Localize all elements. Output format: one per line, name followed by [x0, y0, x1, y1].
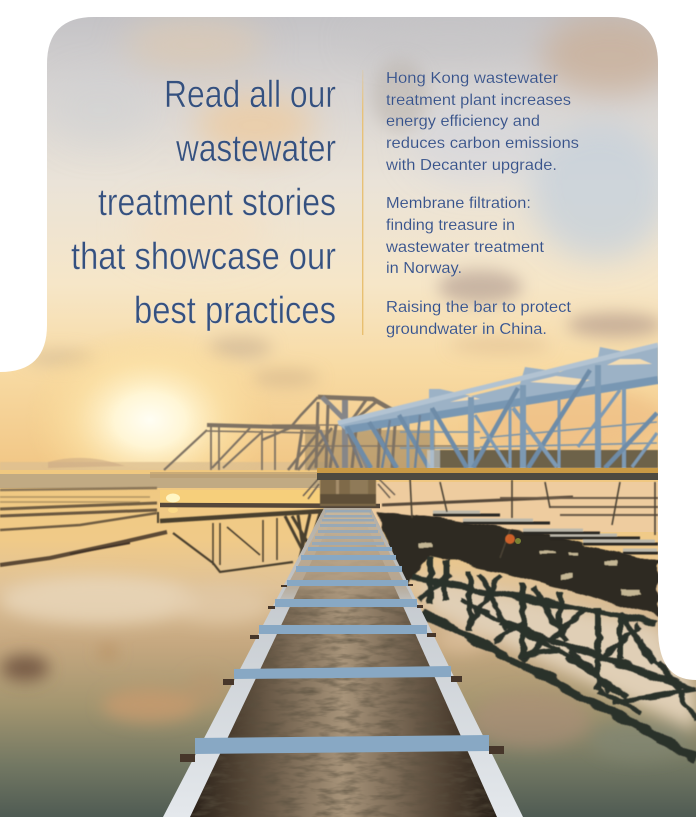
- right tank floats: [382, 478, 658, 558]
- story: Hong Kong: reduces carbon emissions: [386, 135, 579, 152]
- left tank floats: [0, 488, 167, 565]
- text block: heading: wastewater: [175, 128, 336, 170]
- story: Norway: finding treasure in: [386, 217, 515, 234]
- story: Norway: Membrane filtration:: [386, 195, 531, 212]
- distant skyline: [0, 458, 324, 470]
- story: Norway: in Norway.: [386, 260, 462, 277]
- sun glow: [62, 368, 240, 470]
- text block: heading: best practices: [134, 290, 336, 332]
- truss diagonals and posts: [471, 365, 598, 468]
- water: [0, 470, 696, 817]
- text block: stories: [385, 70, 579, 338]
- left truss reflection: [158, 511, 325, 572]
- truss rails: [400, 422, 657, 448]
- story: Hong Kong: [385, 70, 579, 174]
- truss top deck: [338, 345, 658, 430]
- central pillar: [302, 478, 396, 506]
- water channel: [190, 551, 497, 817]
- story: Norway: wastewater treatment: [385, 239, 545, 256]
- rim of circular tank: [160, 505, 380, 506]
- divider: [362, 70, 363, 335]
- lighter water near bridge: [280, 512, 412, 599]
- small beams near bridge: [312, 510, 384, 545]
- hedge behind truss: [430, 450, 658, 468]
- sun reflection: [166, 494, 180, 513]
- sky: [0, 15, 696, 477]
- right shadow and reflection of truss: [376, 512, 696, 757]
- far truss: [164, 397, 470, 470]
- lens flare: [505, 534, 521, 544]
- story: Hong Kong: energy efficiency and: [386, 113, 540, 130]
- text block: heading: Read all our: [164, 74, 336, 116]
- story: Hong Kong: with Decanter upgrade.: [385, 157, 557, 174]
- bridge deck: [150, 468, 658, 480]
- story: China: [386, 299, 572, 338]
- main truss: [338, 345, 658, 469]
- story: Hong Kong: treatment plant increases: [386, 92, 571, 109]
- text block: heading: treatment stories: [98, 182, 336, 224]
- beam bolts: [180, 584, 504, 762]
- walkway: [163, 508, 523, 817]
- walkway side rails: [163, 508, 523, 817]
- story: Norway: [385, 195, 545, 277]
- story: Hong Kong: Hong Kong wastewater: [386, 70, 558, 87]
- story: China: groundwater in China.: [386, 321, 547, 338]
- text block: heading: that showcase our: [71, 236, 336, 278]
- water ripple texture: [190, 586, 496, 817]
- text block: heading: [71, 74, 336, 332]
- cross beams: [195, 547, 489, 754]
- story: China: Raising the bar to protect: [386, 299, 572, 316]
